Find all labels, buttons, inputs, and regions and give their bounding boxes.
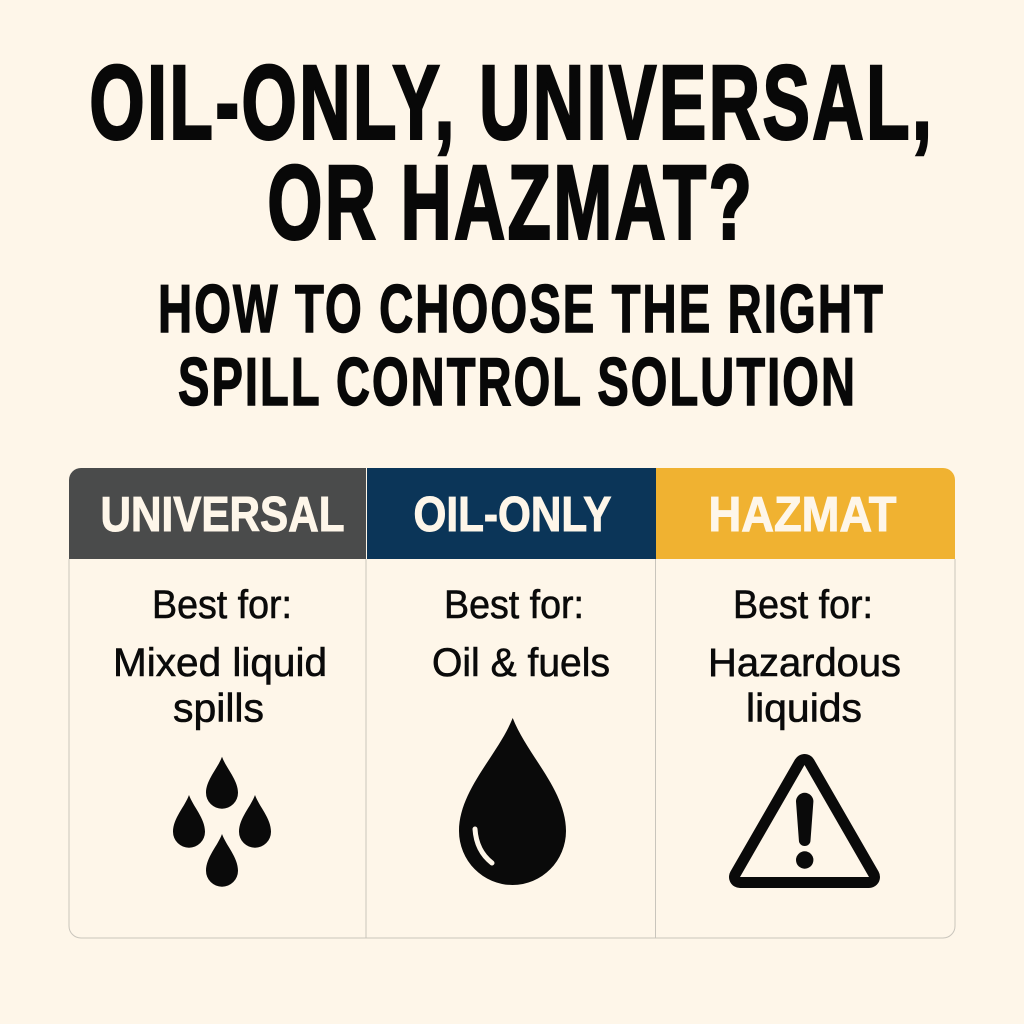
panel: hazmat [656,468,955,877]
universal header: UNIVERSAL [100,487,344,542]
hazmat description: Hazardous [708,641,901,685]
comparison table [69,468,955,938]
panel: oil-only [367,468,656,885]
subtitle [158,271,885,420]
hazmat description [708,583,901,730]
title [90,44,934,262]
universal description: Best for: [152,583,292,627]
oil-only header [367,468,656,559]
universal description: spills [173,686,264,730]
icon: large oil drop [459,718,566,885]
universal header [69,468,366,559]
panel: universal [69,468,366,887]
oil-only description [432,583,610,685]
oil-only header: OIL-ONLY [414,487,612,542]
table outline [69,559,955,938]
oil-only description: Best for: [444,583,584,627]
hazmat description: liquids [746,686,862,730]
hazmat description: Best for: [733,583,873,627]
universal description [113,583,327,730]
hazmat header: HAZMAT [708,487,896,542]
hazmat header [656,468,955,559]
oil-only description: Oil & fuels [432,641,610,685]
icon: four small droplets [173,757,271,887]
universal description: Mixed liquid [113,641,327,685]
title: OR HAZMAT? [268,144,754,262]
icon: warning triangle [740,765,869,877]
